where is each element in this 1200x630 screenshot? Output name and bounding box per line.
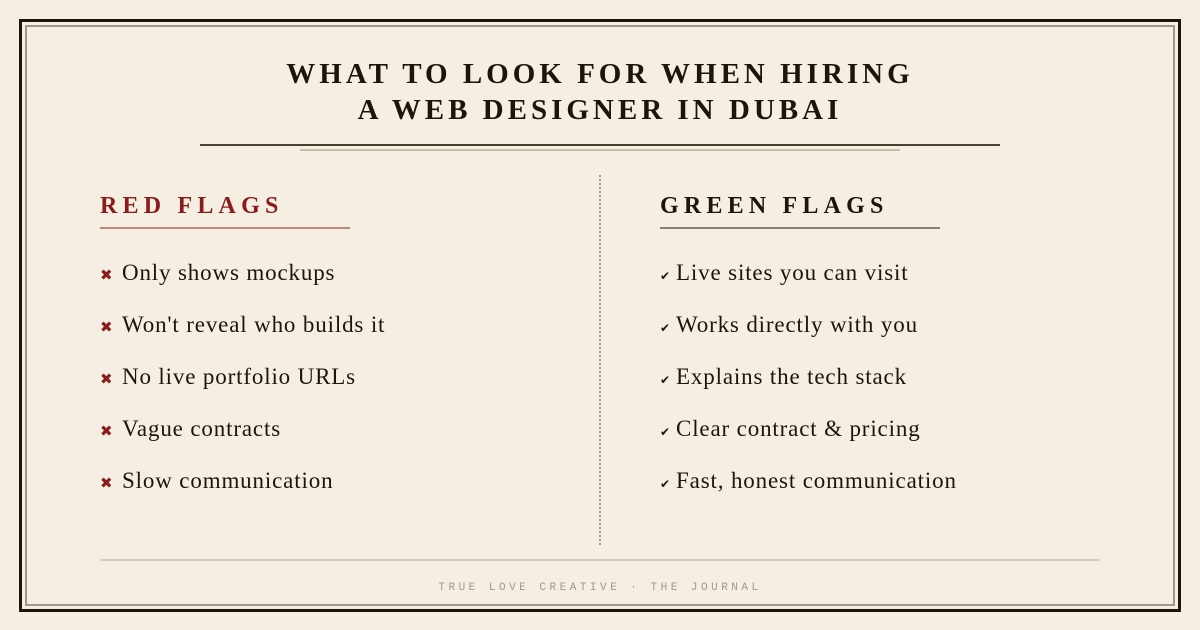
title: WHAT TO LOOK FOR WHEN HIRING xyxy=(286,58,914,90)
list: red flags: Slow communication xyxy=(122,468,333,493)
list: green flags: ✔ xyxy=(660,269,670,283)
list: green flags: Fast, honest communication xyxy=(676,468,957,493)
list: green flags: Clear contract & pricing xyxy=(676,416,921,441)
list: green flags: ✔ xyxy=(660,425,670,439)
title: A WEB DESIGNER IN DUBAI xyxy=(358,94,842,126)
heading: red flags: RED FLAGS xyxy=(100,193,284,219)
list: green flags: ✔ xyxy=(660,477,670,491)
list: green flags: Explains the tech stack xyxy=(676,364,907,389)
list: green flags: Works directly with you xyxy=(676,312,918,337)
list: red flags: ✖ xyxy=(100,424,113,440)
list: red flags: ✖ xyxy=(100,268,113,284)
heading: green flags: GREEN FLAGS xyxy=(660,193,889,219)
list: red flags: ✖ xyxy=(100,372,113,388)
list: green flags xyxy=(660,260,957,493)
list: red flags: Only shows mockups xyxy=(122,260,335,285)
list: red flags: ✖ xyxy=(100,476,113,492)
dashed divider xyxy=(599,175,601,545)
list: red flags: Vague contracts xyxy=(122,416,281,441)
list: red flags: Won't reveal who builds it xyxy=(122,312,385,337)
list: green flags: ✔ xyxy=(660,321,670,335)
panel: green flags xyxy=(660,193,957,493)
list: red flags xyxy=(100,260,385,493)
list: red flags: ✖ xyxy=(100,320,113,336)
list: red flags: No live portfolio URLs xyxy=(122,364,356,389)
list: green flags: Live sites you can visit xyxy=(676,260,908,285)
footer: TRUE LOVE CREATIVE · THE JOURNAL xyxy=(438,582,762,594)
list: green flags: ✔ xyxy=(660,373,670,387)
panel: red flags xyxy=(100,193,385,493)
title xyxy=(286,58,914,126)
